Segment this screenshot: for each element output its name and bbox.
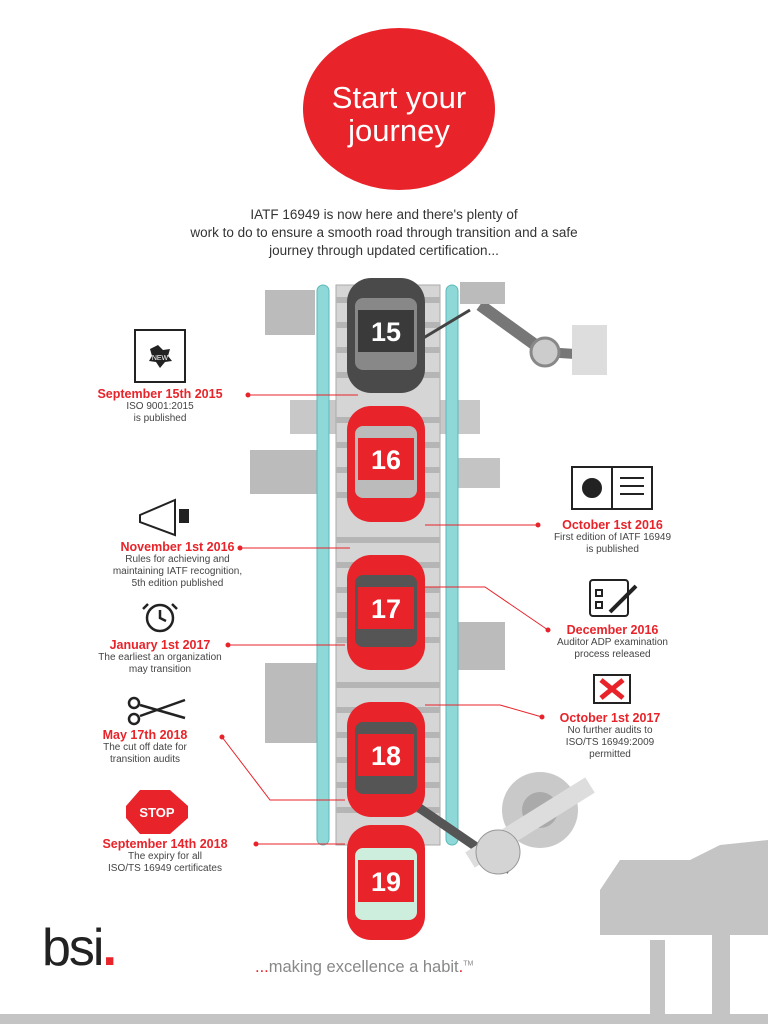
bsi logo: bsi. [42,919,115,977]
robot arm bottom [415,772,590,874]
text: transition audits [110,754,180,765]
text: The expiry for all [128,851,202,862]
conveyor and machinery: 16 [371,445,401,475]
right labels [554,518,671,555]
car lift silhouette [0,840,768,1024]
conveyor and machinery: STOP [139,805,175,820]
left labels: is published [134,413,186,424]
conveyor and machinery: 19 [371,867,401,897]
text: September 14th 2018 [102,837,228,851]
text: The cut off date for [103,742,187,753]
cars [347,278,425,393]
text: January 1st 2017 [110,638,210,652]
cars: 15 [371,317,401,347]
text: ISO/TS 16949:2009 [566,737,654,748]
text: process released [574,649,651,660]
title circle [303,28,495,190]
left labels: September 15th 2015 [97,387,223,401]
text: Rules for achieving and [125,554,230,565]
text: 5th edition published [132,578,223,589]
left labels [97,387,223,424]
conveyor and machinery: 17 [371,594,401,624]
intro text [190,207,578,258]
conveyor and machinery: 18 [371,741,401,771]
intro text: work to do to ensure a smooth road through transition and a safe [190,225,578,240]
text: No further audits to [567,725,653,736]
text: may transition [129,664,191,675]
text: November 1st 2016 [121,540,234,554]
connector lines [220,393,550,846]
text: The earliest an organization [98,652,222,663]
text: December 2016 [567,623,658,637]
robot arm top [420,282,607,375]
intro text: journey through updated certification... [269,243,499,258]
text: ISO/TS 16949 certificates [108,863,222,874]
right labels: is published [586,544,639,555]
icons [135,330,185,382]
text: October 1st 2017 [560,711,660,725]
icons: NEW [152,355,169,362]
text: May 17th 2018 [103,728,187,742]
title circle: journey [348,113,450,148]
tagline: ...making excellence a habit.TM [255,958,473,976]
left labels: ISO 9001:2015 [126,401,194,412]
intro text: IATF 16949 is now here and there's plenty of [250,207,518,222]
text: Auditor ADP examination [557,637,668,648]
right labels: First edition of IATF 16949 [554,532,671,543]
title circle: Start your [332,80,466,115]
text: permitted [589,749,631,760]
right labels: October 1st 2016 [562,518,663,532]
text: maintaining IATF recognition, [113,566,242,577]
